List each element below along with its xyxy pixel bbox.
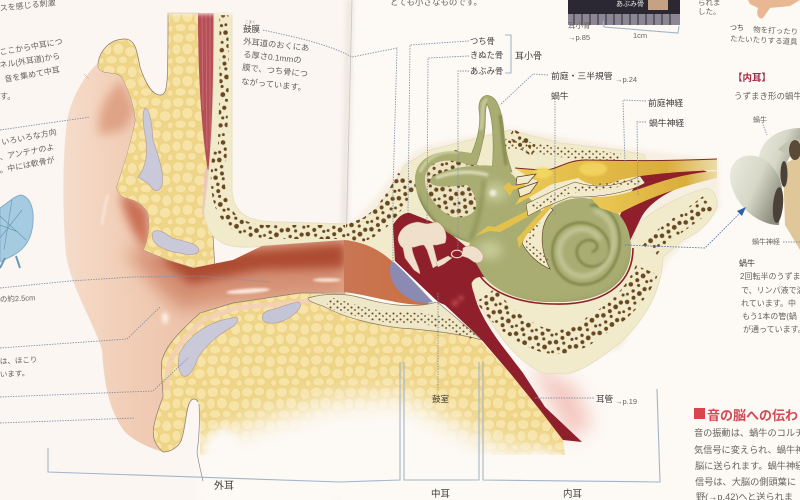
- red space behind nerves: [620, 169, 715, 245]
- labels: inner ear structures: 蝸牛神経: [649, 117, 684, 128]
- helix crease: [84, 74, 89, 79]
- text: auricle note: いろいろな方向: [0, 126, 57, 147]
- label: eardrum note: 外耳道のおくにあ: [243, 36, 310, 53]
- cartilage: lower right: [262, 302, 300, 323]
- labels: inner ear structures: →p.24: [615, 75, 637, 84]
- labyrinth: semicircular canals, vestibule, cochlea: [415, 95, 631, 302]
- labels: divisions: 内耳: [563, 488, 582, 500]
- labels: divisions: 中耳: [431, 488, 450, 500]
- icon: satellite dish: [0, 195, 33, 268]
- lower fat tissue: [153, 293, 565, 455]
- text: cochlea note: 蝸牛: [739, 258, 755, 268]
- text: earwax note: は、ほこり: [0, 355, 38, 366]
- red line below cochlea: [478, 248, 633, 304]
- ear canal: [344, 240, 430, 305]
- labels: inner ear structures: 前庭・三半規管: [551, 70, 613, 81]
- temporal bone: [204, 13, 645, 264]
- text: top right: つち: [730, 24, 744, 32]
- photo strip at top: あぶみ骨: [616, 0, 644, 8]
- heading: inner ear: 【内耳】: [733, 72, 771, 84]
- text: ear canal note: 音を集めて中耳: [4, 64, 60, 84]
- text: canal length: の約2.5cm: [0, 292, 35, 304]
- label: eardrum note: 膜で、つち骨につ: [242, 62, 309, 79]
- outer ear skin: [63, 63, 345, 452]
- labels: divisions: 鼓室: [432, 394, 450, 404]
- cartilage: middle: [152, 231, 199, 255]
- text: auricle note: 。中には軟骨が: [0, 154, 55, 175]
- text: ear canal note: [0, 36, 63, 101]
- label: ossicle scale: 耳小骨: [568, 21, 590, 30]
- muscle: [198, 13, 214, 215]
- upper fat tissue: [98, 13, 215, 270]
- labels: cochlea model: 蝸牛神経: [752, 237, 780, 246]
- notch line below lobe: [197, 404, 203, 481]
- labels: ossicles: 耳小骨: [515, 51, 542, 61]
- labels: cochlea model: [752, 115, 780, 246]
- centre page fold: [334, 0, 800, 500]
- text: how sound reaches the brain: [694, 427, 800, 500]
- label: ossicle scale: 1cm: [633, 31, 647, 40]
- text: top right: [698, 0, 798, 47]
- text: earwax note: います。: [0, 368, 29, 379]
- pink halo behind eustachian tube: [530, 365, 592, 440]
- label: eardrum note: ながっています。: [241, 76, 307, 93]
- labels: ossicles: [470, 36, 542, 76]
- middle ear cavity and eustachian tube: [393, 213, 582, 442]
- inner ear detail: cochlea model: [730, 128, 800, 250]
- stapes ring: [452, 250, 462, 258]
- labels: divisions: 耳管: [596, 394, 614, 404]
- labels: divisions: [214, 394, 637, 500]
- labels: ossicles: あぶみ骨: [470, 66, 503, 76]
- text: cochlea note: 2回転半のうずま: [740, 271, 800, 281]
- brackets: [48, 21, 679, 482]
- label: eardrum note: る厚さ0.1mmの: [243, 49, 302, 65]
- cavity highlights: [452, 296, 463, 306]
- labels: ossicles: つち骨: [470, 36, 495, 46]
- text: top right: 物を打ったり: [753, 24, 798, 36]
- text: ear canal note: す。: [0, 92, 15, 101]
- petrous bone: [472, 188, 717, 374]
- leader lines: [0, 30, 800, 423]
- nerves: [475, 159, 717, 248]
- labyrinth bone window: [420, 150, 484, 222]
- small bone island left of cochlea: [522, 207, 553, 269]
- text: ear canal note: ネル(外耳道)から: [0, 51, 61, 70]
- text: top right: した。: [698, 7, 720, 16]
- text: auricle note: [0, 126, 57, 175]
- labels: divisions: →p.19: [615, 397, 637, 406]
- text: cochlea note: れています。中: [741, 298, 796, 308]
- ossicles: [398, 222, 483, 274]
- lower canal bone: [308, 294, 482, 340]
- labels: divisions: 外耳: [214, 480, 234, 492]
- label: eardrum note: 鼓膜: [243, 24, 261, 34]
- text: earwax note: [0, 355, 38, 379]
- labels: inner ear structures: 蝸牛: [551, 90, 569, 101]
- heading: inner ear: [733, 72, 800, 101]
- text: top right: たたいたりする道具: [730, 33, 798, 47]
- label: ossicle scale: →p.85: [568, 33, 590, 42]
- text: how sound reaches the brain: 信号は、大脳の側頭葉に: [695, 476, 796, 487]
- heading: inner ear: うずまき形の蝸牛: [734, 91, 800, 101]
- text: ear canal note: ここから中耳につ: [0, 36, 63, 57]
- label: ossicle scale: [568, 21, 647, 42]
- lower fat outline: [153, 293, 345, 452]
- labels: ossicles: きぬた骨: [470, 50, 503, 60]
- ear shading: [99, 80, 345, 324]
- fat top fade: [165, 5, 237, 14]
- icon: hammer tip: [748, 0, 800, 18]
- small bone islands between nerves: [516, 174, 645, 216]
- photo strip at top: [568, 0, 680, 25]
- eardrum: [390, 261, 437, 303]
- soft halo around inner bone: [345, 128, 720, 378]
- labels: inner ear structures: 前庭神経: [648, 97, 683, 108]
- text: cochlea note: もう1本の管(蝸: [742, 311, 797, 321]
- text: cochlea note: [739, 258, 800, 334]
- cartilage: upper: [138, 108, 163, 191]
- skin edge on lower fat: [167, 298, 345, 390]
- cartilage: lower left: [178, 317, 238, 376]
- fat fade to paper: [203, 394, 585, 500]
- labels: cochlea model: 蝸牛: [753, 115, 767, 124]
- label: eardrum note: [241, 19, 310, 93]
- text: auricle note: 、アンテナのよ: [0, 143, 55, 162]
- labels: inner ear structures: [551, 70, 684, 128]
- label: eardrum note: こまく: [245, 19, 256, 24]
